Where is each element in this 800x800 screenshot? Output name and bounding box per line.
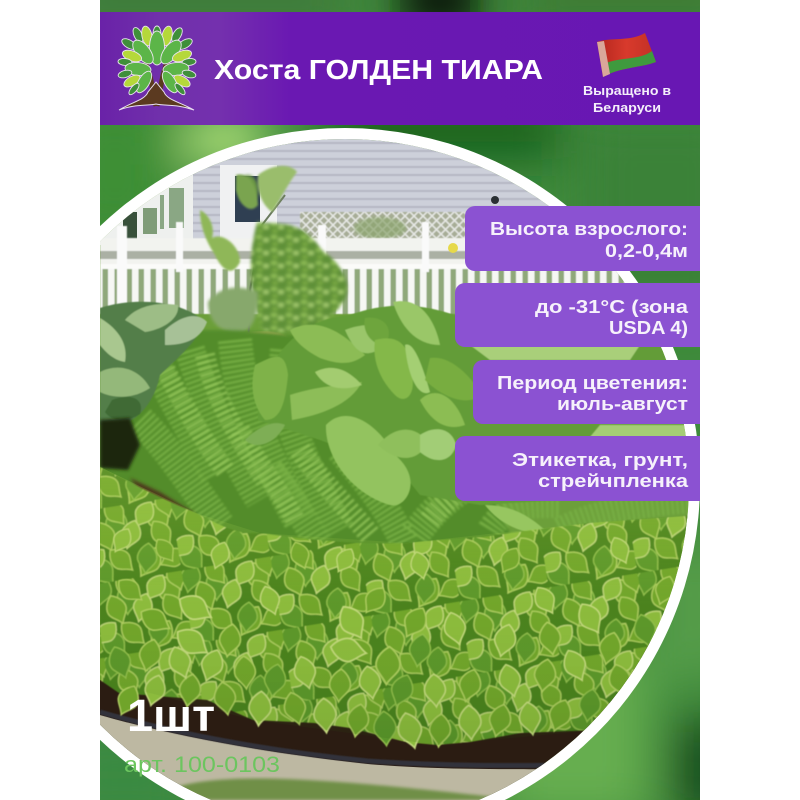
grown in Belarus label: Беларуси: [593, 101, 661, 115]
tag: height: [465, 206, 700, 271]
tag: flowering period: Период цветения:: [497, 373, 688, 393]
tag: hardiness: USDA 4): [609, 318, 688, 338]
tag: height: 0,2-0,4м: [605, 241, 688, 261]
tag: hardiness: до -31°C (зона: [535, 297, 689, 317]
scattered leaves: [105, 525, 679, 751]
quantity label: 1шт: [127, 690, 215, 741]
young tree and shrub: [200, 166, 347, 352]
header band: [100, 12, 700, 125]
tag: flowering period: [473, 360, 700, 424]
white fence: [100, 221, 624, 315]
tag: package contents: Этикетка, грунт,: [512, 450, 688, 470]
grown in Belarus label: [583, 84, 671, 115]
logo: tree: [117, 25, 197, 110]
variegated hosta, left: [100, 302, 207, 425]
tag: package contents: [455, 436, 700, 501]
blurred green background: [100, 0, 700, 800]
grown in Belarus label: Выращено в: [583, 84, 671, 98]
tag: package contents: стрейчпленка: [538, 471, 689, 491]
info tags: [455, 206, 700, 501]
dark soil gap: [100, 418, 140, 470]
ferns: [100, 330, 690, 560]
light falloff over hedge: [100, 467, 700, 745]
large hosta leaves: [245, 301, 700, 535]
hedge of golden tiara hosta: [100, 467, 700, 800]
tag: hardiness: [455, 283, 700, 347]
tag: flowering period: июль-август: [557, 394, 688, 414]
title: Хоста ГОЛДЕН ТИАРА: [214, 54, 543, 85]
tag: height: Высота взрослого:: [490, 219, 688, 239]
icon: Belarus flag: [597, 33, 656, 77]
lattice: [300, 212, 466, 238]
page background: [100, 0, 700, 800]
house wall: [100, 139, 548, 245]
hedge body: [100, 467, 700, 745]
infographic canvas: [100, 0, 700, 800]
yellow flower: [448, 243, 458, 253]
article number: арт. 100-0103: [124, 752, 280, 777]
white circular frame: [100, 128, 700, 800]
dark soil and ground: [100, 644, 650, 800]
photo: garden bed: [100, 120, 705, 800]
